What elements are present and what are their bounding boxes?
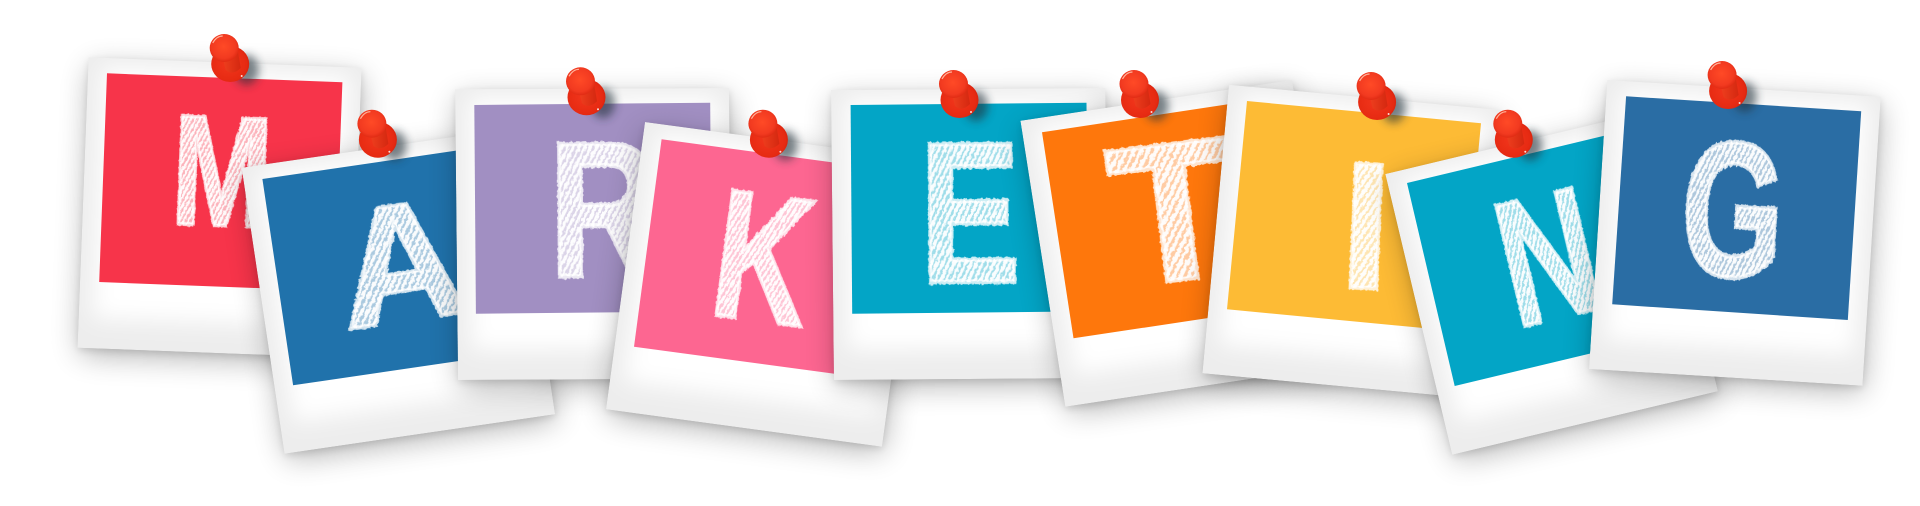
- icon: push pin on G: [1708, 61, 1757, 112]
- paper frame G: [1589, 80, 1881, 392]
- photo G: [1612, 96, 1861, 320]
- card: letter E: [831, 88, 1108, 386]
- letter K: K: [702, 150, 824, 365]
- paper frame A: [242, 128, 556, 460]
- letter M: M: [169, 82, 275, 261]
- card: letter M: [77, 57, 362, 364]
- card: letter A: [242, 128, 556, 460]
- letter N: N: [1479, 150, 1618, 366]
- card: letter G: [1589, 80, 1881, 392]
- card: letter R: [455, 88, 732, 386]
- letter G: G: [1676, 99, 1790, 320]
- photo T: [1042, 97, 1306, 338]
- icon: push pin on K: [748, 110, 797, 161]
- letter I: I: [1337, 124, 1395, 327]
- paper frame E: [831, 88, 1108, 386]
- photo R: [474, 103, 712, 314]
- photo E: [851, 103, 1088, 314]
- paper frame T: [1020, 80, 1338, 413]
- card: letter N: [1385, 111, 1719, 460]
- paper frame R: [455, 88, 732, 386]
- photo I: [1227, 101, 1481, 332]
- icon: push pin on A: [357, 110, 406, 161]
- icon: push pin on E: [939, 70, 988, 121]
- card: letter K: [605, 122, 921, 453]
- letter E: E: [919, 102, 1021, 325]
- photo K: [634, 139, 896, 378]
- card: letter T: [1020, 80, 1338, 413]
- icon: push pin on R: [566, 67, 615, 118]
- letter T: T: [1098, 95, 1250, 329]
- letter R: R: [549, 102, 659, 317]
- paper frame I: [1202, 85, 1501, 405]
- icon: push pin on N: [1493, 110, 1542, 161]
- icon: push pin on M: [210, 34, 259, 85]
- photo M: [99, 73, 342, 291]
- icon: push pin on I: [1357, 72, 1406, 123]
- paper frame K: [605, 122, 921, 453]
- paper frame N: [1385, 111, 1719, 460]
- paper frame M: [77, 57, 362, 364]
- letter A: A: [325, 162, 476, 365]
- photo A: [262, 145, 525, 385]
- icon: push pin on T: [1120, 70, 1168, 121]
- card: letter I: [1202, 85, 1501, 405]
- photo N: [1407, 128, 1684, 386]
